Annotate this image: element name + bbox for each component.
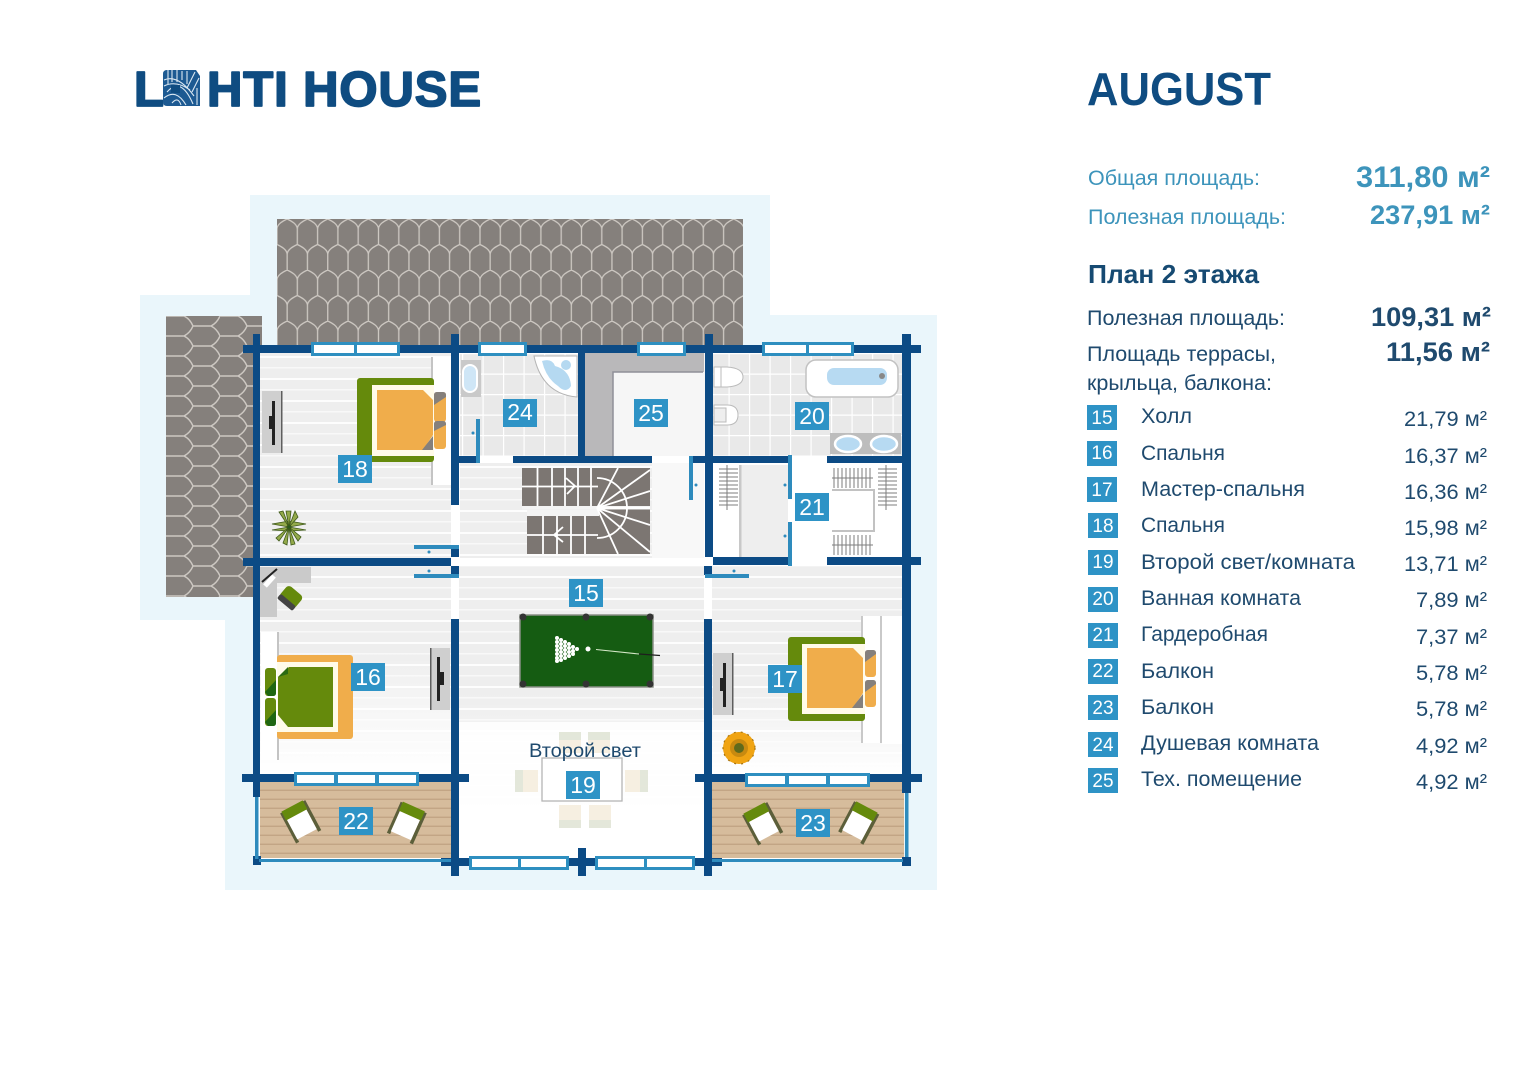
room labels: 18 [342,456,368,482]
roof: top [277,219,743,349]
chair: balcony 22 right [387,801,427,844]
wardrobe racks [719,465,897,555]
chair [277,584,304,611]
icon: wood grain square [163,70,200,106]
legend row 15: 15 [1091,408,1113,429]
legend row 18: 15,98 м² [1404,517,1487,540]
legend row 20: Ванная комната [1141,587,1301,610]
floor 2 areas [1087,302,1491,395]
bed [261,632,353,760]
area summary: 237,91 м² [1370,200,1490,230]
floor 2 areas: 11,56 м² [1386,337,1490,367]
legend row 24: 4,92 м² [1416,735,1487,758]
balcony chairs [280,799,880,845]
legend row 22 [1088,659,1487,685]
room labels: 25 [638,400,664,426]
tv unit [713,653,734,715]
legend row 18: 18 [1092,516,1114,537]
desk [260,567,311,617]
floor 2 heading: План 2 этажа [1088,259,1260,289]
legend row 23: Балкон [1141,696,1214,719]
floor 2 areas: Площадь террасы, [1087,343,1276,366]
walls [242,334,922,876]
area summary: Общая площадь: [1088,167,1260,190]
room labels: 21 [799,494,825,520]
legend row 24 [1088,732,1487,758]
legend row 23 [1088,695,1487,721]
site background [140,195,937,890]
balcony rails and doors [255,419,908,862]
legend row 25: 4,92 м² [1416,771,1487,794]
legend row 20: 20 [1092,589,1114,610]
balcony floors [260,782,904,858]
room labels: 17 [772,666,798,692]
legend row 15: Холл [1141,405,1192,428]
title: August: AUGUST [1087,63,1271,115]
legend row 18: Спальня [1141,514,1225,537]
dining table and chairs [515,732,648,828]
legend row 19 [1088,550,1487,576]
sinks [830,433,901,454]
legend row 21: 21 [1092,625,1114,646]
legend row 24: 24 [1092,735,1114,756]
text: second light: Второй свет [529,741,641,762]
legend row 17: 17 [1091,480,1113,501]
windows [294,342,870,870]
tv unit [430,648,450,710]
floor plan [140,195,937,890]
legend row 21: Гардеробная [1141,623,1268,646]
chair: balcony 22 left [280,799,321,843]
area summary: 311,80 м² [1356,161,1490,194]
legend row 23: 5,78 м² [1416,698,1487,721]
bathtub [806,360,898,397]
legend row 16: 16,37 м² [1404,445,1487,468]
legend row 24: Душевая комната [1141,732,1319,755]
shower room fixtures [461,356,577,397]
legend row 20: 7,89 м² [1416,589,1487,612]
room labels: 23 [800,810,826,836]
bedroom 17 furniture [713,616,902,764]
room 21 wardrobe floor [714,465,788,557]
rooms floors [258,350,904,860]
legend row 19: Второй свет/комната [1141,551,1355,574]
bedroom 18 furniture [262,357,451,545]
floor 2 areas: 109,31 м² [1371,302,1491,332]
legend row 17 [1087,477,1487,504]
bed [357,357,451,485]
legend row 15 [1087,405,1487,431]
legend row 17: Мастер-спальня [1141,478,1305,501]
legend row 21 [1088,623,1487,649]
chair: balcony 23 right [838,800,880,845]
floor 2 areas: крыльца, балкона: [1087,372,1272,395]
room labels [338,399,830,837]
icon: plant [272,511,306,545]
room labels: 15 [573,580,599,606]
legend row 16: Спальня [1141,442,1225,465]
tile floors [460,353,902,456]
legend row 25 [1088,768,1487,794]
legend row 19: 13,71 м² [1404,553,1487,576]
area summary [1088,161,1490,230]
floor 2 areas: Полезная площадь: [1087,307,1285,330]
stairs [522,468,650,554]
room labels: 19 [570,772,596,798]
roof: left [166,316,262,597]
logo: Lahti House: L [134,63,164,117]
icon: sunflower [723,732,755,764]
rooms legend [1087,405,1487,794]
legend row 17: 16,36 м² [1404,481,1487,504]
area summary: Полезная площадь: [1088,206,1286,229]
room labels: 16 [355,664,381,690]
legend row 19: 19 [1092,552,1114,573]
bidet [714,405,738,425]
legend row 16: 16 [1091,443,1113,464]
legend row 23: 23 [1092,698,1114,719]
room labels: 20 [799,403,825,429]
legend row 22: 22 [1092,661,1114,682]
legend row 15: 21,79 м² [1404,408,1487,431]
chair: balcony 23 left [742,801,783,845]
bed [788,616,902,744]
room labels: 24 [507,399,533,425]
bedroom 16 furniture [260,567,450,760]
utility room L unit [585,353,704,456]
legend row 18 [1088,513,1487,540]
legend row 16 [1087,441,1487,468]
logo: Lahti House: HTI HOUSE [207,63,481,117]
tv unit [262,391,282,453]
legend row 21: 7,37 м² [1416,626,1487,649]
legend row 25: Тех. помещение [1141,768,1302,791]
legend row 20 [1088,587,1487,612]
legend row 22: Балкон [1141,660,1214,683]
toilet [714,367,743,387]
legend row 25: 25 [1092,771,1114,792]
billiard table [520,614,660,688]
legend row 22: 5,78 м² [1416,662,1487,685]
bathroom fixtures [714,360,901,454]
room labels: 22 [343,808,369,834]
